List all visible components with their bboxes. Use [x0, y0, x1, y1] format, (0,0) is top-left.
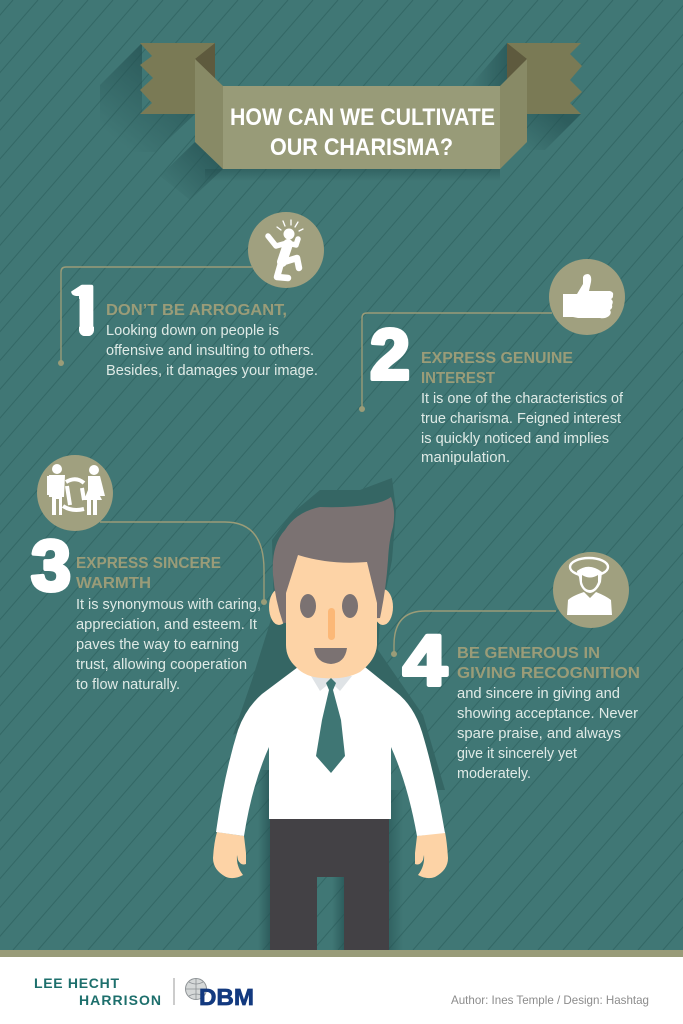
- businessman figure: [213, 497, 448, 950]
- Lee Hecht Harrison logo: [34, 975, 161, 1008]
- author credit: Author: Ines Temple / Design: Hashtag: [451, 993, 649, 1007]
- number 1: 1: [65, 273, 104, 352]
- right hand: [415, 832, 448, 878]
- heading 2: INTEREST: [421, 370, 495, 387]
- number 2: 2: [370, 316, 410, 395]
- icon circle: thumbs up: [549, 259, 625, 335]
- face: [286, 555, 377, 678]
- tip 1: [58, 212, 324, 379]
- body 3: paves the way to earning: [76, 636, 239, 653]
- eye left: [300, 594, 316, 618]
- body 3: It is synonymous with caring,: [76, 596, 261, 613]
- heading 1: DON’T BE ARROGANT,: [106, 302, 287, 319]
- left hand: [213, 832, 246, 878]
- number 4: 4: [403, 622, 448, 701]
- body 1: Looking down on people is: [106, 322, 279, 339]
- title text: [230, 104, 495, 161]
- inner arm shading: [258, 770, 403, 950]
- footer panel: [0, 957, 683, 1024]
- mouth: [314, 648, 347, 664]
- body 4: moderately.: [457, 765, 531, 782]
- body 4: and sincere in giving and: [457, 685, 620, 702]
- ribbon long shadows: [100, 43, 581, 200]
- icon circle: man and woman exchanging: [37, 455, 113, 531]
- heading 4: [457, 645, 640, 682]
- body 3: [76, 596, 261, 693]
- title text: OUR CHARISMA?: [270, 134, 453, 161]
- tip 3: [31, 455, 267, 693]
- tip 2: [359, 259, 625, 466]
- tie: [316, 678, 345, 773]
- body 1: Besides, it damages your image.: [106, 362, 318, 379]
- body 4: spare praise, and always: [457, 725, 621, 742]
- heading 2: [421, 350, 573, 387]
- title ribbon: [100, 43, 582, 200]
- body 2: [421, 390, 624, 466]
- ear left: [269, 589, 289, 625]
- heading 2: EXPRESS GENUINE: [421, 350, 573, 367]
- body 3: trust, allowing cooperation: [76, 656, 247, 673]
- body 1: offensive and insulting to others.: [106, 342, 314, 359]
- Lee Hecht Harrison logo: HARRISON: [79, 992, 161, 1008]
- body 4: give it sincerely yet: [457, 745, 578, 762]
- eye right: [342, 594, 358, 618]
- icon circle: dancing person: [248, 212, 324, 288]
- number 3: 3: [31, 527, 71, 606]
- shirt: [216, 667, 445, 836]
- hair: [273, 497, 394, 623]
- connector line 1: [58, 267, 252, 366]
- DBM logo: DBM: [199, 984, 254, 1010]
- left ribbon tail: [140, 43, 215, 114]
- body 2: It is one of the characteristics of: [421, 390, 624, 407]
- body 2: true charisma. Feigned interest: [421, 410, 622, 427]
- heading 3: WARMTH: [76, 575, 151, 592]
- heading 3: EXPRESS SINCERE: [76, 555, 221, 572]
- body 2: manipulation.: [421, 449, 510, 466]
- ear right: [373, 589, 393, 625]
- collar: [311, 676, 352, 691]
- ribbon centre: [223, 86, 500, 169]
- body 3: to flow naturally.: [76, 676, 180, 693]
- connector line 3: [100, 522, 267, 605]
- title text: HOW CAN WE CULTIVATE: [230, 104, 495, 131]
- figure long shadow: [233, 478, 445, 790]
- DBM logo: [186, 978, 254, 1010]
- connector line 4: [391, 611, 556, 657]
- body 1: [106, 322, 318, 379]
- trousers: [270, 815, 389, 950]
- right ribbon tail: [507, 43, 582, 114]
- Lee Hecht Harrison logo: LEE HECHT: [34, 975, 119, 991]
- logo divider: [174, 978, 175, 1005]
- tip 4: [391, 552, 640, 782]
- heading 4: GIVING RECOGNITION: [457, 665, 640, 682]
- left ribbon fold: [195, 59, 223, 169]
- body 4: [457, 685, 638, 782]
- right ribbon fold: [500, 59, 527, 169]
- body 3: appreciation, and esteem. It: [76, 616, 258, 633]
- left fold shade: [195, 43, 223, 92]
- nose: [328, 608, 335, 640]
- heading 3: [76, 555, 221, 592]
- icon circle: person with halo: [553, 552, 629, 628]
- connector line 2: [359, 313, 552, 412]
- right fold shade: [500, 43, 527, 92]
- body 4: showing acceptance. Never: [457, 705, 638, 722]
- heading 4: BE GENEROUS IN: [457, 645, 600, 662]
- body 2: is quickly noticed and implies: [421, 430, 609, 447]
- footer strip: [0, 950, 683, 957]
